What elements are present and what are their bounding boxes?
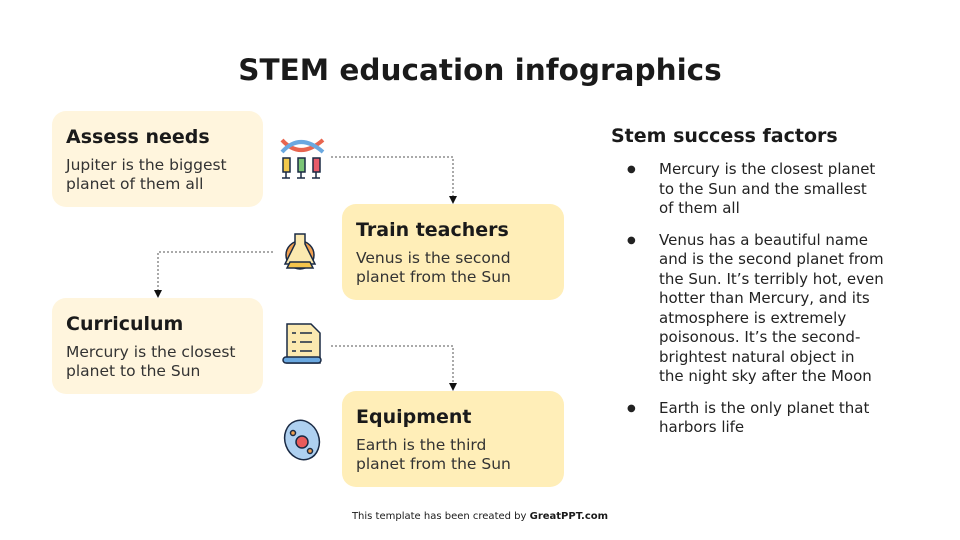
panel: train teachers: Venus is the second (356, 249, 511, 267)
icon: cell (279, 415, 325, 465)
heading: success factors: Stem success factors (611, 125, 838, 147)
panel: curriculum: Curriculum (66, 313, 183, 335)
bullet list: the night sky after the Moon (659, 367, 872, 385)
bullet list: atmosphere is extremely (659, 308, 846, 326)
bullet list: Mercury is the closest planet (659, 160, 875, 178)
panel: train teachers (342, 204, 564, 300)
panel: equipment: Earth is the third (356, 436, 486, 454)
bullet list: brightest natural object in (659, 348, 855, 366)
panel: curriculum: planet to the Sun (66, 362, 200, 380)
icon: dna syringes (282, 140, 323, 178)
icon: checklist (283, 324, 321, 363)
panel: train teachers: planet from the Sun (356, 268, 511, 286)
bullet list: the Sun. It’s terribly hot, even (659, 270, 884, 288)
bullet list: Venus has a beautiful name (659, 230, 868, 248)
title: STEM education infographics (238, 53, 722, 87)
panel: equipment: Equipment (356, 406, 472, 428)
panel: curriculum: Mercury is the closest (66, 343, 236, 361)
arrow: curriculum to equipment (331, 346, 453, 383)
panel: assess needs: Assess needs (66, 126, 210, 148)
panel: equipment (342, 391, 564, 487)
bullet list: and is the second planet from (659, 250, 884, 268)
bullet list: poisonous. It’s the second- (659, 328, 860, 346)
panel: assess needs: planet of them all (66, 175, 203, 193)
bullet list: hotter than Mercury, and its (659, 289, 870, 307)
arrow: assess to train (331, 157, 453, 196)
footer: This template has been created by GreatPPT.com (352, 511, 608, 522)
panel: equipment: planet from the Sun (356, 455, 511, 473)
arrow: train to curriculum (158, 252, 273, 290)
panel: assess needs: Jupiter is the biggest (66, 156, 227, 174)
panel: train teachers: Train teachers (356, 219, 509, 241)
panel: assess needs (52, 111, 263, 207)
bullet list: to the Sun and the smallest (659, 180, 867, 198)
bullet list: Earth is the only planet that (659, 398, 869, 416)
bullet list (628, 160, 884, 436)
icon: flask (285, 234, 315, 269)
bullet list: of them all (659, 199, 740, 217)
panel: curriculum (52, 298, 263, 394)
bullet list: harbors life (659, 418, 744, 436)
